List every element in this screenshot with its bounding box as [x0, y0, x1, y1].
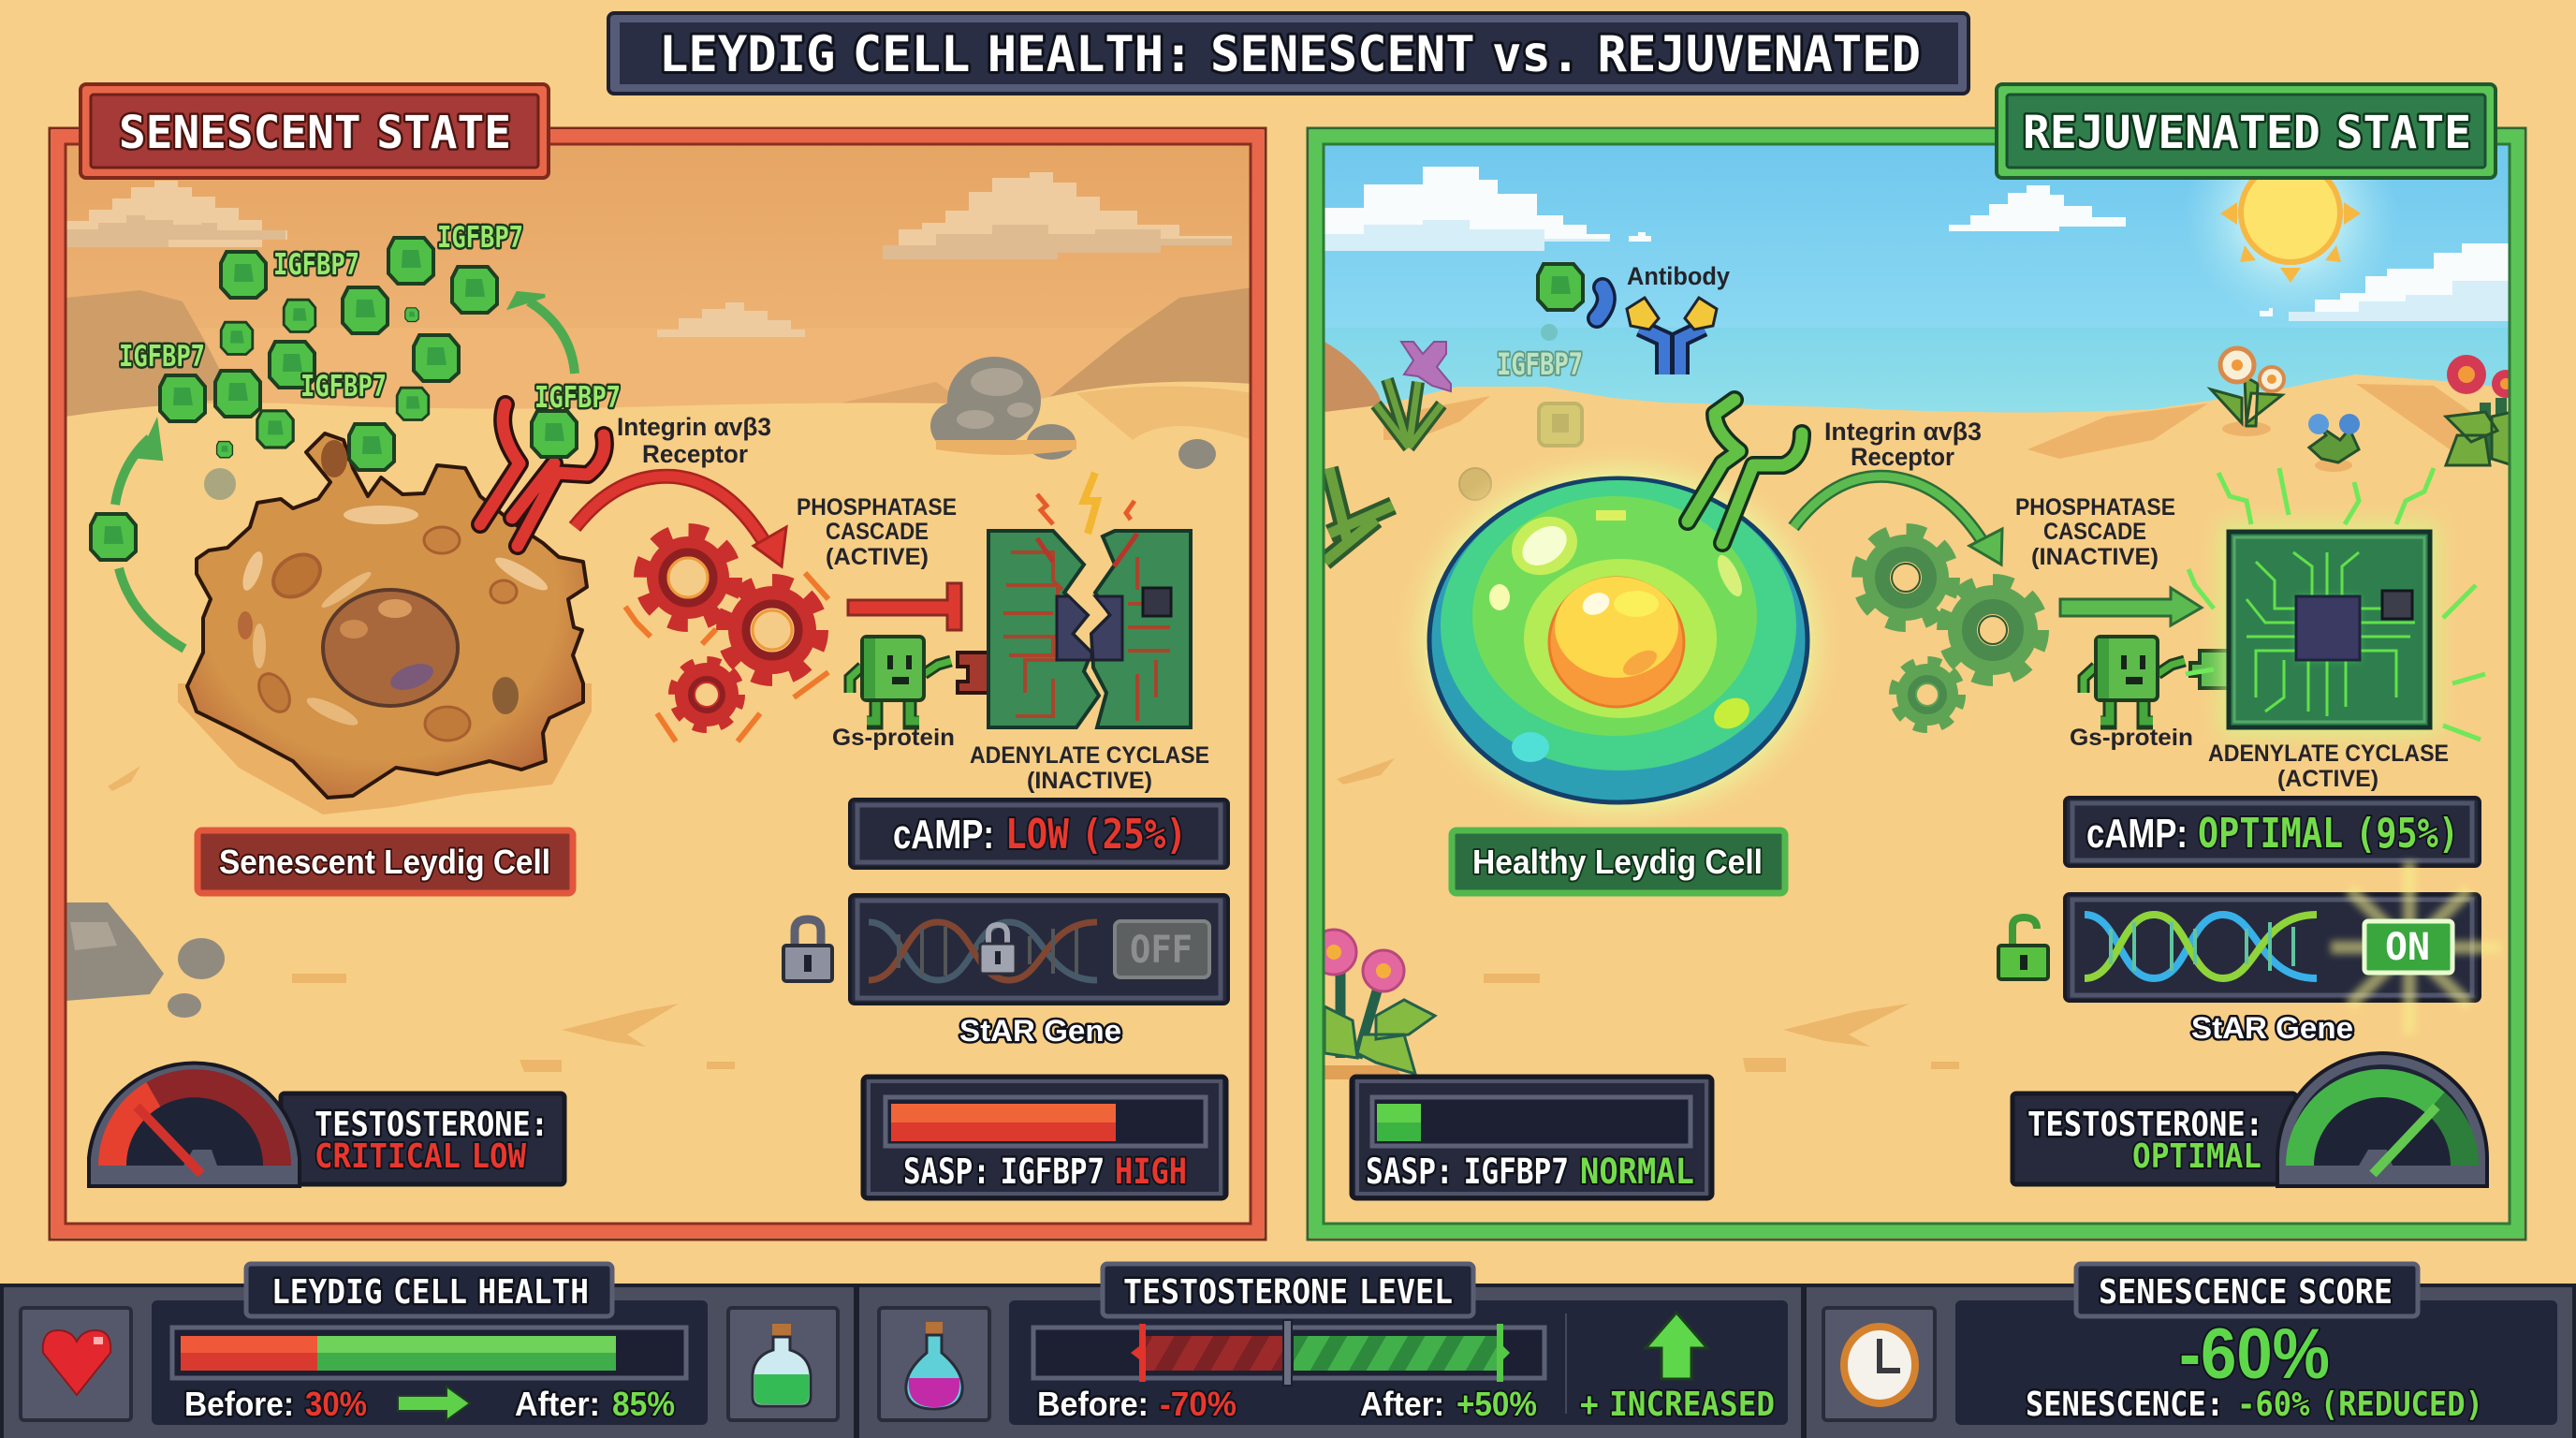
- SASP meter: normal: [1352, 1077, 1712, 1198]
- cAMP readout: optimal: [2065, 798, 2480, 866]
- testosterone bar: -70%: [1160, 1385, 1237, 1423]
- health bar: Before:: [184, 1385, 294, 1423]
- cell name label: Senescent Leydig Cell: [219, 843, 550, 881]
- section tab: senescence score: SENESCENCE SCORE: [2099, 1273, 2393, 1312]
- rocks: lower left: [66, 902, 225, 1018]
- green potion slot: [728, 1308, 838, 1420]
- cAMP readout: low: LOW (25%): [1005, 811, 1187, 858]
- cAMP readout: optimal: cAMP:: [2086, 811, 2188, 857]
- Gs-protein character: [2084, 637, 2185, 723]
- senescent state label: [80, 84, 549, 178]
- panel: senescent state: [50, 84, 1266, 1240]
- adenylate cyclase label: (INACTIVE): [1027, 768, 1152, 794]
- receptor label: [1824, 418, 1982, 471]
- score panel: [1955, 1300, 2557, 1425]
- secreted IGFBP7 particles: [91, 238, 497, 560]
- SASP meter: high: HIGH: [1115, 1152, 1187, 1192]
- plant: purple flower: [1376, 342, 1451, 448]
- antibody Y: [1627, 298, 1717, 374]
- IGFBP7 labels: IGFBP7: [119, 340, 205, 374]
- section: testosterone level: [879, 1264, 1807, 1438]
- plant: lower-left pink flowers: [1311, 930, 1435, 1079]
- adenylate cyclase label: [2208, 741, 2449, 792]
- activity sparks: [2186, 468, 2485, 740]
- SASP meter: normal: NORMAL: [1580, 1152, 1694, 1192]
- testosterone bar: After:: [1360, 1385, 1444, 1423]
- cell name label: [198, 830, 573, 893]
- score panel: SENESCENCE:: [2026, 1386, 2224, 1424]
- DNA helix: muted: [869, 922, 1097, 980]
- section tab: testosterone level: TESTOSTERONE LEVEL: [1123, 1273, 1453, 1312]
- IGFBP7 particle on cell stalk: [349, 424, 394, 470]
- IGFBP7 labels: IGFBP7: [300, 370, 387, 404]
- section: senescence score: [1823, 1264, 2557, 1425]
- health bar: [152, 1300, 708, 1425]
- score panel: -60% (REDUCED): [2237, 1386, 2483, 1424]
- activation arrow: [2060, 588, 2202, 625]
- testosterone gauge: critical low: TESTOSTERONE:: [315, 1106, 549, 1144]
- rock: large: [930, 357, 1076, 460]
- sparks on broken chip: [1037, 473, 1137, 566]
- testosterone gauge: critical low: [89, 1064, 564, 1186]
- testosterone bar: +50%: [1456, 1385, 1537, 1423]
- phosphatase label: PHOSPHATASE: [797, 494, 957, 521]
- inhibition bar: [848, 583, 961, 630]
- antibody label: Antibody: [1627, 262, 1730, 290]
- heart slot: [21, 1308, 131, 1420]
- Gs-protein character: [850, 637, 951, 723]
- ON switch: [2364, 921, 2452, 973]
- receptor label: Integrin αvβ3: [617, 413, 771, 441]
- testosterone gauge: optimal: TESTOSTERONE:: [2027, 1106, 2263, 1144]
- integrin receptor: green: [1688, 400, 1802, 543]
- receptor label: Integrin αvβ3: [1824, 418, 1982, 446]
- faded IGFBP7 label: IGFBP7: [1497, 346, 1583, 382]
- panel frame: green: [1308, 128, 2525, 1240]
- OFF switch: [1115, 921, 1209, 977]
- title banner: [608, 13, 1969, 94]
- cell name label: Healthy Leydig Cell: [1472, 843, 1763, 881]
- cAMP readout: optimal: OPTIMAL (95%): [2198, 810, 2459, 858]
- neutralised IGFBP7 and antibody: [1459, 262, 1730, 500]
- cell name label: [1452, 830, 1785, 893]
- receptor label: Receptor: [642, 440, 748, 468]
- phosphatase label: CASCADE: [826, 519, 929, 545]
- desert background: [66, 144, 1252, 1224]
- receptor label: Receptor: [1851, 443, 1954, 471]
- sun: [2183, 108, 2398, 323]
- signal arrow: green: [1793, 477, 2002, 565]
- padlock: on helix: [980, 925, 1016, 974]
- section tab: Leydig cell health: [246, 1264, 612, 1316]
- recirculation arrows: [115, 293, 575, 649]
- adenylate cyclase label: (ACTIVE): [2277, 766, 2378, 792]
- SASP meter: high: [863, 1077, 1226, 1198]
- phosphatase label: [797, 494, 957, 570]
- Gs-protein label: Gs-protein: [832, 725, 955, 751]
- health bar: 85%: [612, 1385, 675, 1423]
- OFF switch: OFF: [1130, 929, 1193, 972]
- ON switch: ON: [2385, 926, 2430, 969]
- gears: overactive phosphatases: [625, 531, 828, 741]
- IGFBP7 bound to receptor: [532, 411, 577, 457]
- padlock: open: [1998, 917, 2048, 979]
- IGFBP7 labels: [119, 221, 621, 415]
- adenylate cyclase chip: active: [2220, 522, 2438, 736]
- gears: inactive phosphatases: [1859, 531, 2042, 727]
- StAR gene label: StAR Gene: [959, 1014, 1121, 1048]
- rejuvenated state label: [1997, 84, 2496, 178]
- plant: blue buds: [2308, 414, 2360, 472]
- faded IGFBP7 particles: [1459, 324, 1582, 500]
- cAMP readout: low: [850, 800, 1228, 868]
- IGFBP7 labels: IGFBP7: [534, 381, 621, 415]
- padlock: closed: [783, 919, 832, 981]
- plant: left shrub: [1325, 468, 1393, 562]
- StAR gene panel: on: [2065, 861, 2501, 1034]
- signal arrow: red: [575, 477, 786, 566]
- StAR gene label: StAR Gene: [2191, 1011, 2353, 1045]
- IGFBP7 labels: IGFBP7: [273, 248, 359, 282]
- IGFBP7 labels: IGFBP7: [437, 221, 523, 255]
- StAR gene panel: off: [850, 895, 1228, 1004]
- Gs plug: damaged: [958, 653, 1007, 693]
- SASP meter: normal: SASP: IGFBP7: [1366, 1152, 1569, 1192]
- integrin receptor: red: [480, 404, 605, 546]
- phosphatase label: [2015, 494, 2175, 570]
- testosterone gauge: critical low: CRITICAL LOW: [315, 1137, 526, 1176]
- phosphatase label: (INACTIVE): [2031, 544, 2159, 570]
- testosterone gauge: optimal: OPTIMAL: [2132, 1137, 2261, 1176]
- beach background: [1311, 108, 2520, 1224]
- health bar: 30%: [305, 1385, 367, 1423]
- section tab: Leydig cell health: LEYDIG CELL HEALTH: [271, 1273, 589, 1312]
- section tab: senescence score: [2076, 1264, 2418, 1316]
- clock slot: [1823, 1308, 1935, 1420]
- adenylate cyclase label: ADENYLATE CYCLASE: [2208, 741, 2449, 767]
- section tab: testosterone level: [1103, 1264, 1473, 1316]
- SASP meter: high: SASP: IGFBP7: [903, 1152, 1105, 1192]
- adenylate cyclase chip: broken: [988, 531, 1191, 727]
- phosphatase label: CASCADE: [2043, 519, 2146, 545]
- senescent state label: SENESCENT STATE: [119, 107, 511, 159]
- senescent Leydig cell: [178, 433, 592, 814]
- increase arrow: [1646, 1313, 1707, 1379]
- Gs plug: connected: [2190, 651, 2245, 688]
- Gs-protein label: Gs-protein: [2070, 725, 2193, 751]
- ON switch rays: [2331, 861, 2501, 1034]
- receptor label: [617, 413, 771, 468]
- panel: rejuvenated state: [1308, 84, 2525, 1240]
- rock: small: [1178, 439, 1216, 469]
- cAMP readout: low: cAMP:: [893, 812, 994, 858]
- purple potion slot: [879, 1308, 989, 1420]
- panel frame: red: [50, 128, 1266, 1240]
- plant: red flowers: [2446, 355, 2520, 465]
- testosterone bar: [1009, 1300, 1788, 1425]
- bottom status bar: [2, 1264, 2574, 1438]
- antibody fragment: [1597, 287, 1606, 318]
- phosphatase label: (ACTIVE): [826, 544, 929, 570]
- testosterone bar: Before:: [1037, 1385, 1149, 1423]
- increased label: + INCREASED: [1580, 1386, 1775, 1424]
- rejuvenated state label: REJUVENATED STATE: [2023, 107, 2471, 159]
- plant: orange flowers: [2211, 348, 2284, 436]
- health bar: After:: [515, 1385, 600, 1423]
- adenylate cyclase label: [970, 742, 1209, 794]
- section: Leydig cell health: [21, 1264, 859, 1438]
- adenylate cyclase label: ADENYLATE CYCLASE: [970, 742, 1209, 769]
- testosterone gauge: optimal: [2012, 1053, 2487, 1186]
- DNA helix: bright: [2085, 915, 2317, 978]
- healthy Leydig cell: [1389, 439, 1848, 842]
- phosphatase label: PHOSPHATASE: [2015, 494, 2175, 521]
- score panel: -60%: [2179, 1314, 2330, 1394]
- title banner: LEYDIG CELL HEALTH: SENESCENT vs. REJUVENATED: [659, 26, 1921, 83]
